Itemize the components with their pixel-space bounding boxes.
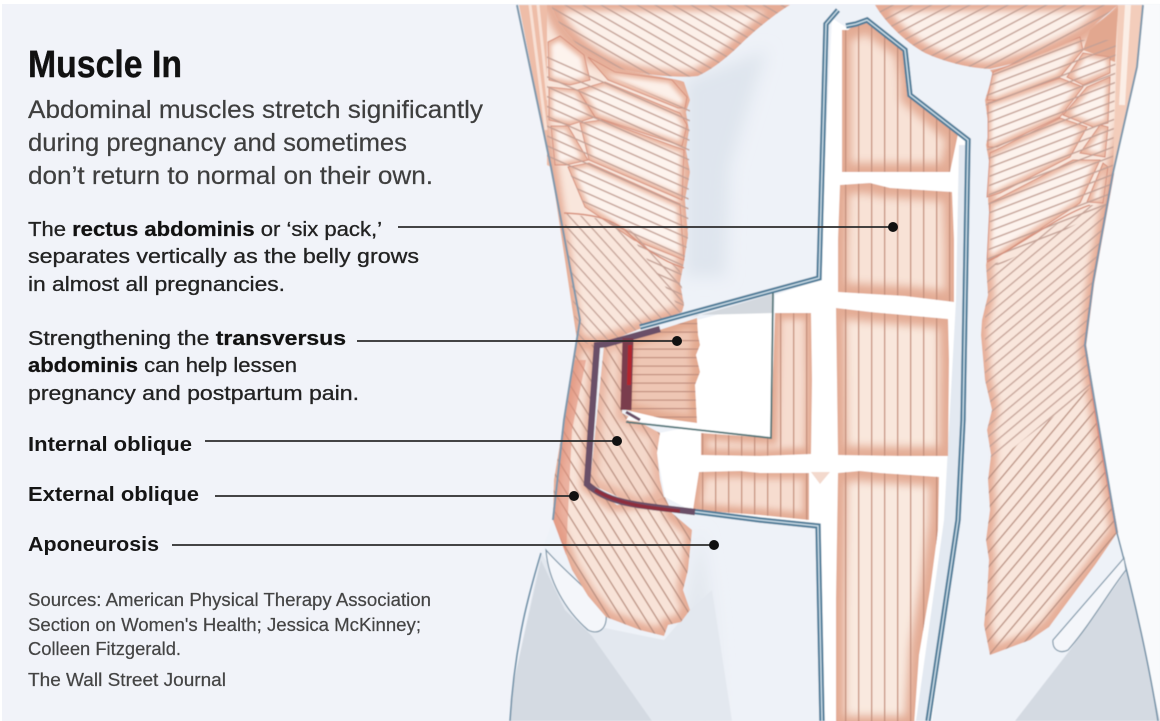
cut muscle edge, oblique layers (587, 329, 695, 512)
intro text: during pregnancy and sometimes (28, 129, 407, 157)
hip bone right (1053, 558, 1126, 652)
outer right margin (1085, 4, 1160, 721)
rectus abdominis text: in almost all pregnancies. (28, 274, 285, 296)
rectus abdominis text: The rectus abdominis or ‘six pack,’ (28, 219, 382, 241)
rectus long lower segment (836, 471, 939, 721)
leader: external oblique (215, 491, 579, 501)
midline diamond (811, 472, 830, 484)
sheath left blue line (626, 10, 838, 438)
rectus small lower segment (693, 471, 809, 520)
transversus abdominis text: Strengthening the transversus (28, 328, 346, 350)
title: Muscle In (28, 44, 182, 86)
sheath lower blue line (690, 511, 822, 721)
white window (626, 300, 773, 438)
grey band under sheath (690, 294, 773, 318)
rectus abdominis text (28, 219, 419, 296)
leader: internal oblique (205, 436, 622, 446)
torso illustration (510, 4, 1160, 721)
leader: aponeurosis (172, 540, 719, 550)
torso body surface (510, 5, 1160, 721)
sheath inner shade (916, 145, 966, 721)
oblique right (981, 5, 1143, 660)
transversus abdominis (626, 318, 700, 423)
internal oblique (590, 340, 664, 507)
transversus abdominis text (28, 328, 359, 405)
pelvis grey shading (510, 533, 1160, 721)
rectus segment 2 (838, 183, 954, 302)
transversus abdominis text: abdominis can help lessen (28, 355, 297, 377)
label: aponeurosis: Aponeurosis (28, 534, 159, 556)
intro text (28, 96, 484, 190)
leader: transversus abdominis (357, 336, 682, 346)
sheath right blue line (846, 20, 968, 721)
chest muscle left (551, 5, 790, 77)
rectus small upper segment (701, 313, 812, 456)
intro text: don’t return to normal on their own. (28, 162, 433, 190)
intro text: Abdominal muscles stretch significantly (28, 96, 484, 124)
body outline (517, 5, 1143, 533)
white sheath opening (657, 18, 968, 721)
sources: Colleen Fitzgerald. (28, 639, 181, 659)
sources (28, 590, 431, 690)
chest muscle right (875, 5, 1118, 69)
cut muscle edge, transversus layer (626, 338, 640, 420)
rectus segment 3 (836, 308, 949, 456)
label: internal oblique: Internal oblique (28, 434, 192, 456)
external oblique upper left (519, 5, 690, 345)
sources: The Wall Street Journal (28, 670, 226, 690)
oblique right red edge (1085, 173, 1117, 533)
sources: Sources: American Physical Therapy Association (28, 590, 431, 610)
rectus segment 1 (842, 20, 958, 172)
leader: rectus abdominis (398, 222, 898, 232)
transversus abdominis text: pregnancy and postpartum pain. (28, 383, 359, 405)
hip bone left (546, 550, 606, 632)
sources: Section on Women's Health; Jessica McKinney; (28, 615, 421, 635)
external oblique lower left (553, 340, 692, 636)
label: external oblique: External oblique (28, 484, 199, 506)
rectus abdominis text: separates vertically as the belly grows (28, 246, 419, 268)
